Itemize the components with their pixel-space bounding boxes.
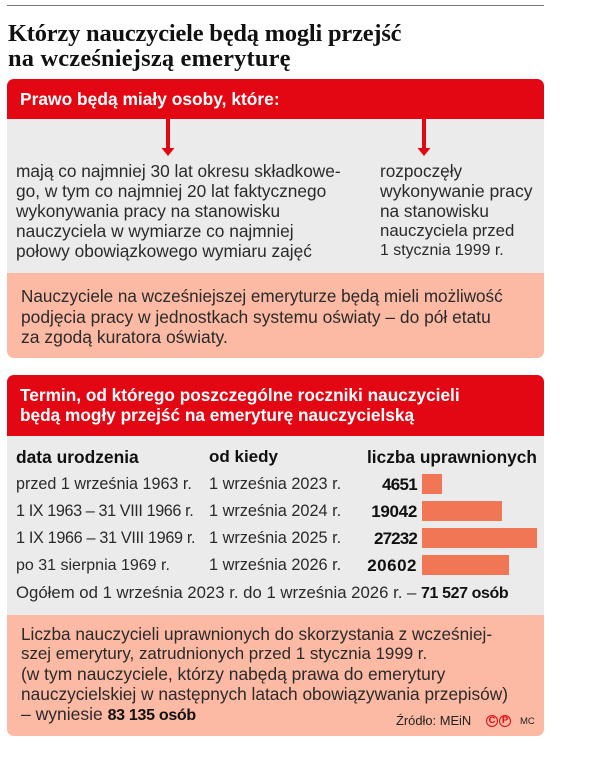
column: counts: 20602 (367, 556, 417, 575)
column: counts: 4651 (382, 475, 417, 494)
column: counts (367, 475, 418, 575)
header: start date: od kiedy (209, 447, 278, 466)
column: start dates: 1 września 2025 r. (209, 529, 341, 547)
arrow: left (162, 119, 174, 156)
panel: eligibility (7, 79, 544, 358)
schedule heading (20, 385, 460, 425)
bar chart (422, 474, 537, 575)
column: birth dates (16, 475, 195, 574)
column: birth dates: 1 IX 1966 – 31 VIII 1969 r. (16, 529, 195, 547)
text: left criterion: nauczyciela w wymiarze co najmniej (16, 221, 294, 241)
panel: schedule (7, 375, 544, 736)
note band (7, 273, 544, 358)
text: note: za zgodą kuratora oświaty. (21, 327, 228, 347)
text: summary: (w tym nauczyciele, którzy nabędą prawa do emerytury (21, 664, 445, 684)
text: summary: szej emerytury, zatrudnionych przed 1 stycznia 1999 r. (21, 644, 427, 663)
source: Źródło: MEiN (396, 713, 471, 728)
text: left criterion: połowy obowiązkowego wymiaru zajęć (16, 241, 312, 261)
title (8, 20, 401, 72)
column: counts: 19042 (371, 502, 417, 521)
title: Którzy nauczyciele będą mogli przejść (8, 20, 401, 47)
column: start dates: 1 września 2024 r. (209, 502, 341, 520)
total: Ogółem od 1 września 2023 r. do 1 września 2026 r. – 71 527 osób (16, 583, 508, 602)
text: summary: – wyniesie 83 135 osób (21, 704, 196, 724)
text: right criterion: 1 stycznia 1999 r. (380, 242, 504, 259)
copyright marks: P (502, 715, 508, 726)
text: note: Nauczyciele na wcześniejszej emeryturze będą mieli możliwość (21, 287, 503, 306)
schedule heading: Termin, od którego poszczególne roczniki nauczycieli (20, 385, 460, 405)
title: na wcześniejszą emeryturę (8, 45, 291, 72)
text: right criterion: na stanowisku (380, 201, 489, 221)
text: left criterion: wykonywania pracy na stanowisku (16, 201, 280, 221)
column: start dates: 1 września 2026 r. (209, 556, 341, 574)
header: birth date: data urodzenia (16, 447, 139, 467)
text: note: podjęcia pracy w jednostkach systemu oświaty – do pół etatu (21, 307, 491, 327)
text: summary: Liczba nauczycieli uprawnionych do skorzystania z wcześniej- (21, 624, 492, 644)
copyright marks (486, 715, 511, 727)
copyright marks: C (489, 715, 495, 726)
text: summary: nauczycielskiej w następnych latach obowiązywania przepisów) (21, 684, 508, 704)
text: summary (21, 624, 508, 724)
schedule header (7, 375, 544, 436)
text: left criterion (16, 161, 341, 261)
summary band (7, 615, 544, 736)
schedule heading: będą mogły przejść na emeryturę nauczycielską (20, 405, 414, 425)
author initials: MC (520, 716, 535, 727)
text: right criterion: rozpoczęły (380, 161, 462, 181)
text: left criterion: mają co najmniej 30 lat okresu składkowe- (16, 161, 341, 181)
text: left criterion: go, w tym co najmniej 20 lat faktycznego (16, 181, 326, 201)
eligibility heading: Prawo będą miały osoby, które: (20, 89, 280, 109)
text: note (21, 287, 503, 347)
arrow: right (418, 119, 430, 156)
column: start dates: 1 września 2023 r. (209, 475, 341, 493)
eligibility header (7, 79, 544, 119)
column: birth dates: po 31 sierpnia 1969 r. (16, 557, 170, 574)
column: counts: 27232 (374, 529, 417, 548)
column: birth dates: przed 1 września 1963 r. (16, 475, 192, 493)
column: birth dates: 1 IX 1963 – 31 VIII 1966 r. (16, 502, 193, 520)
text: right criterion: nauczyciela przed (380, 221, 514, 240)
text: right criterion (380, 161, 533, 259)
header: count: liczba uprawnionych (367, 447, 537, 467)
column: start dates (209, 475, 341, 574)
text: right criterion: wykonywanie pracy (380, 181, 533, 201)
